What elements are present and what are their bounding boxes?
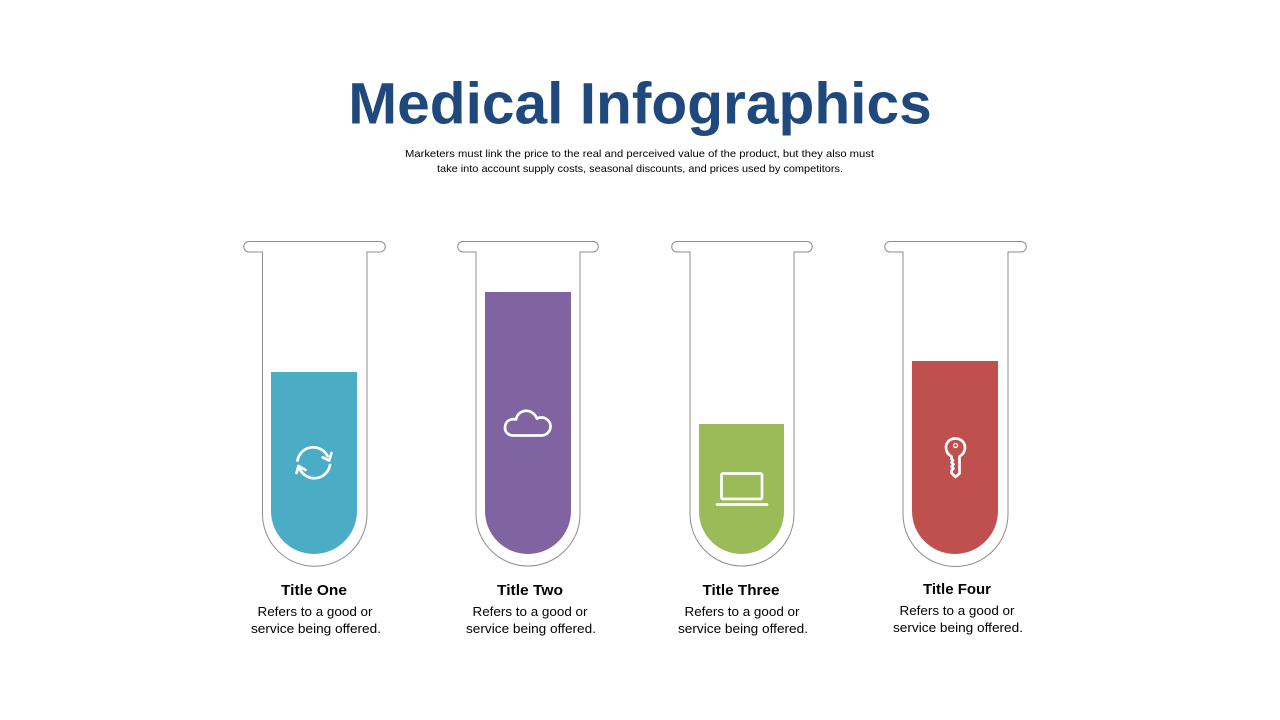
label four: service being offered. [893, 620, 1023, 635]
subtitle text block: Marketers must link the price to the real and perceived value of the product, but they also must [405, 148, 874, 160]
panel: test tube four [885, 242, 1026, 635]
label two: Refers to a good or [472, 604, 588, 619]
subtitle text block: take into account supply costs, seasonal discounts, and prices used by competitors. [437, 163, 843, 175]
subtitle text block [405, 148, 874, 175]
icon: refresh arrows [296, 447, 332, 478]
label one: Refers to a good or [258, 604, 373, 619]
icon: cloud [505, 411, 550, 436]
label three: Refers to a good or [684, 604, 800, 619]
label one [251, 582, 381, 636]
label four: Refers to a good or [900, 603, 1015, 618]
label two: Title Two [497, 582, 563, 599]
icon: key [946, 438, 965, 477]
tube outline three [672, 242, 812, 566]
panel: test tube two [458, 242, 598, 636]
tube outline four [885, 242, 1026, 567]
label two [466, 582, 596, 636]
panel: test tube one [244, 242, 385, 636]
label three: Title Three [702, 582, 780, 599]
label one: Title One [281, 582, 347, 599]
label one: service being offered. [251, 621, 381, 636]
label three: service being offered. [678, 621, 808, 636]
tube outline two [458, 242, 598, 566]
label four: Title Four [923, 581, 991, 598]
liquid fill four [912, 361, 998, 554]
title: Medical Infographics [348, 72, 932, 136]
label four [893, 581, 1023, 635]
liquid fill one [271, 372, 357, 554]
icon: laptop [717, 474, 767, 504]
label two: service being offered. [466, 621, 596, 636]
tube outline one [244, 242, 385, 566]
label three [678, 582, 808, 636]
liquid fill three [699, 424, 784, 554]
panel: test tube three [672, 242, 812, 636]
liquid fill two [485, 292, 571, 554]
